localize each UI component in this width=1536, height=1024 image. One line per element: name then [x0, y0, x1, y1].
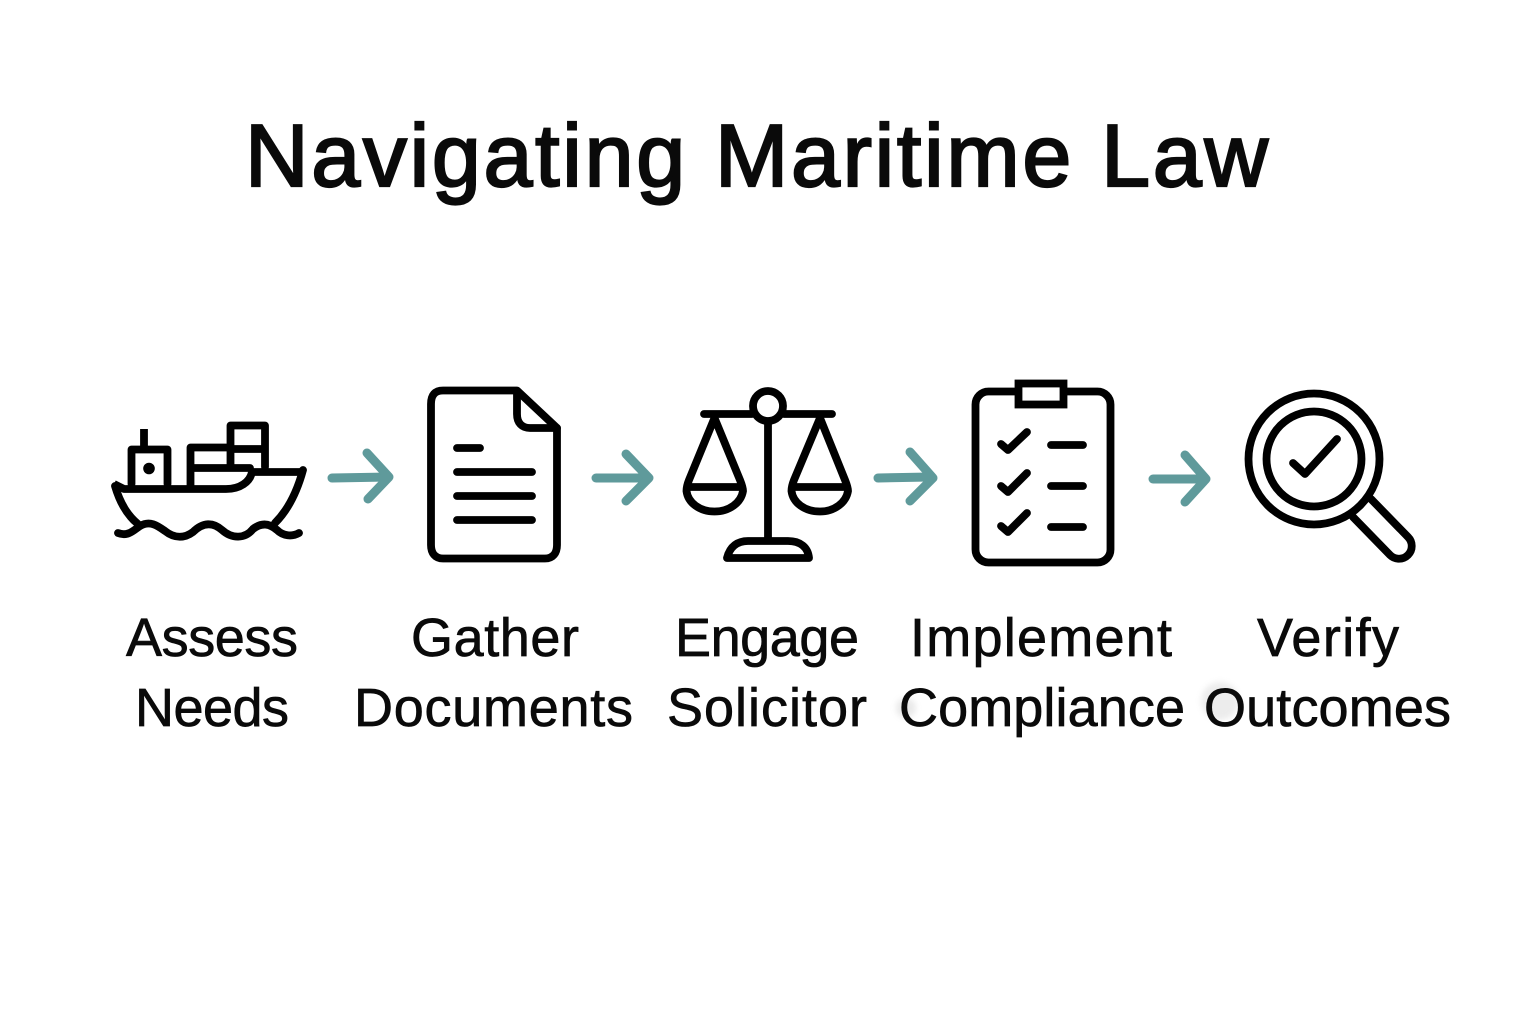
- icon: clipboard checklist: [976, 384, 1110, 562]
- label: implement compliance: Compliance: [899, 678, 1185, 738]
- label: engage solicitor: Engage: [675, 608, 859, 668]
- label: assess needs: Needs: [135, 678, 289, 738]
- arrow: implement to verify: [1153, 455, 1206, 502]
- arrow: gather to engage: [596, 454, 649, 501]
- icon: document: [431, 390, 557, 558]
- icon: magnifier with check: [1248, 394, 1412, 559]
- label: gather documents: Gather: [411, 608, 579, 668]
- label: verify outcomes: Outcomes: [1204, 678, 1451, 738]
- label: verify outcomes: Verify: [1257, 608, 1399, 668]
- label: verify outcomes: [1201, 608, 1451, 738]
- icon: scales of justice: [686, 391, 848, 558]
- label: gather documents: Documents: [354, 678, 633, 738]
- label: implement compliance: Implement: [910, 608, 1172, 668]
- label: engage solicitor: [667, 608, 867, 738]
- label: gather documents: [354, 608, 633, 738]
- label: assess needs: Assess: [126, 608, 298, 668]
- title: Navigating Maritime Law: [245, 106, 1268, 205]
- label: engage solicitor: Solicitor: [667, 678, 867, 738]
- label: assess needs: [126, 608, 298, 738]
- arrow: engage to implement: [878, 452, 933, 501]
- label: implement compliance: [896, 608, 1185, 738]
- arrow: assess to gather: [332, 453, 389, 499]
- icon: cargo ship: [114, 426, 303, 537]
